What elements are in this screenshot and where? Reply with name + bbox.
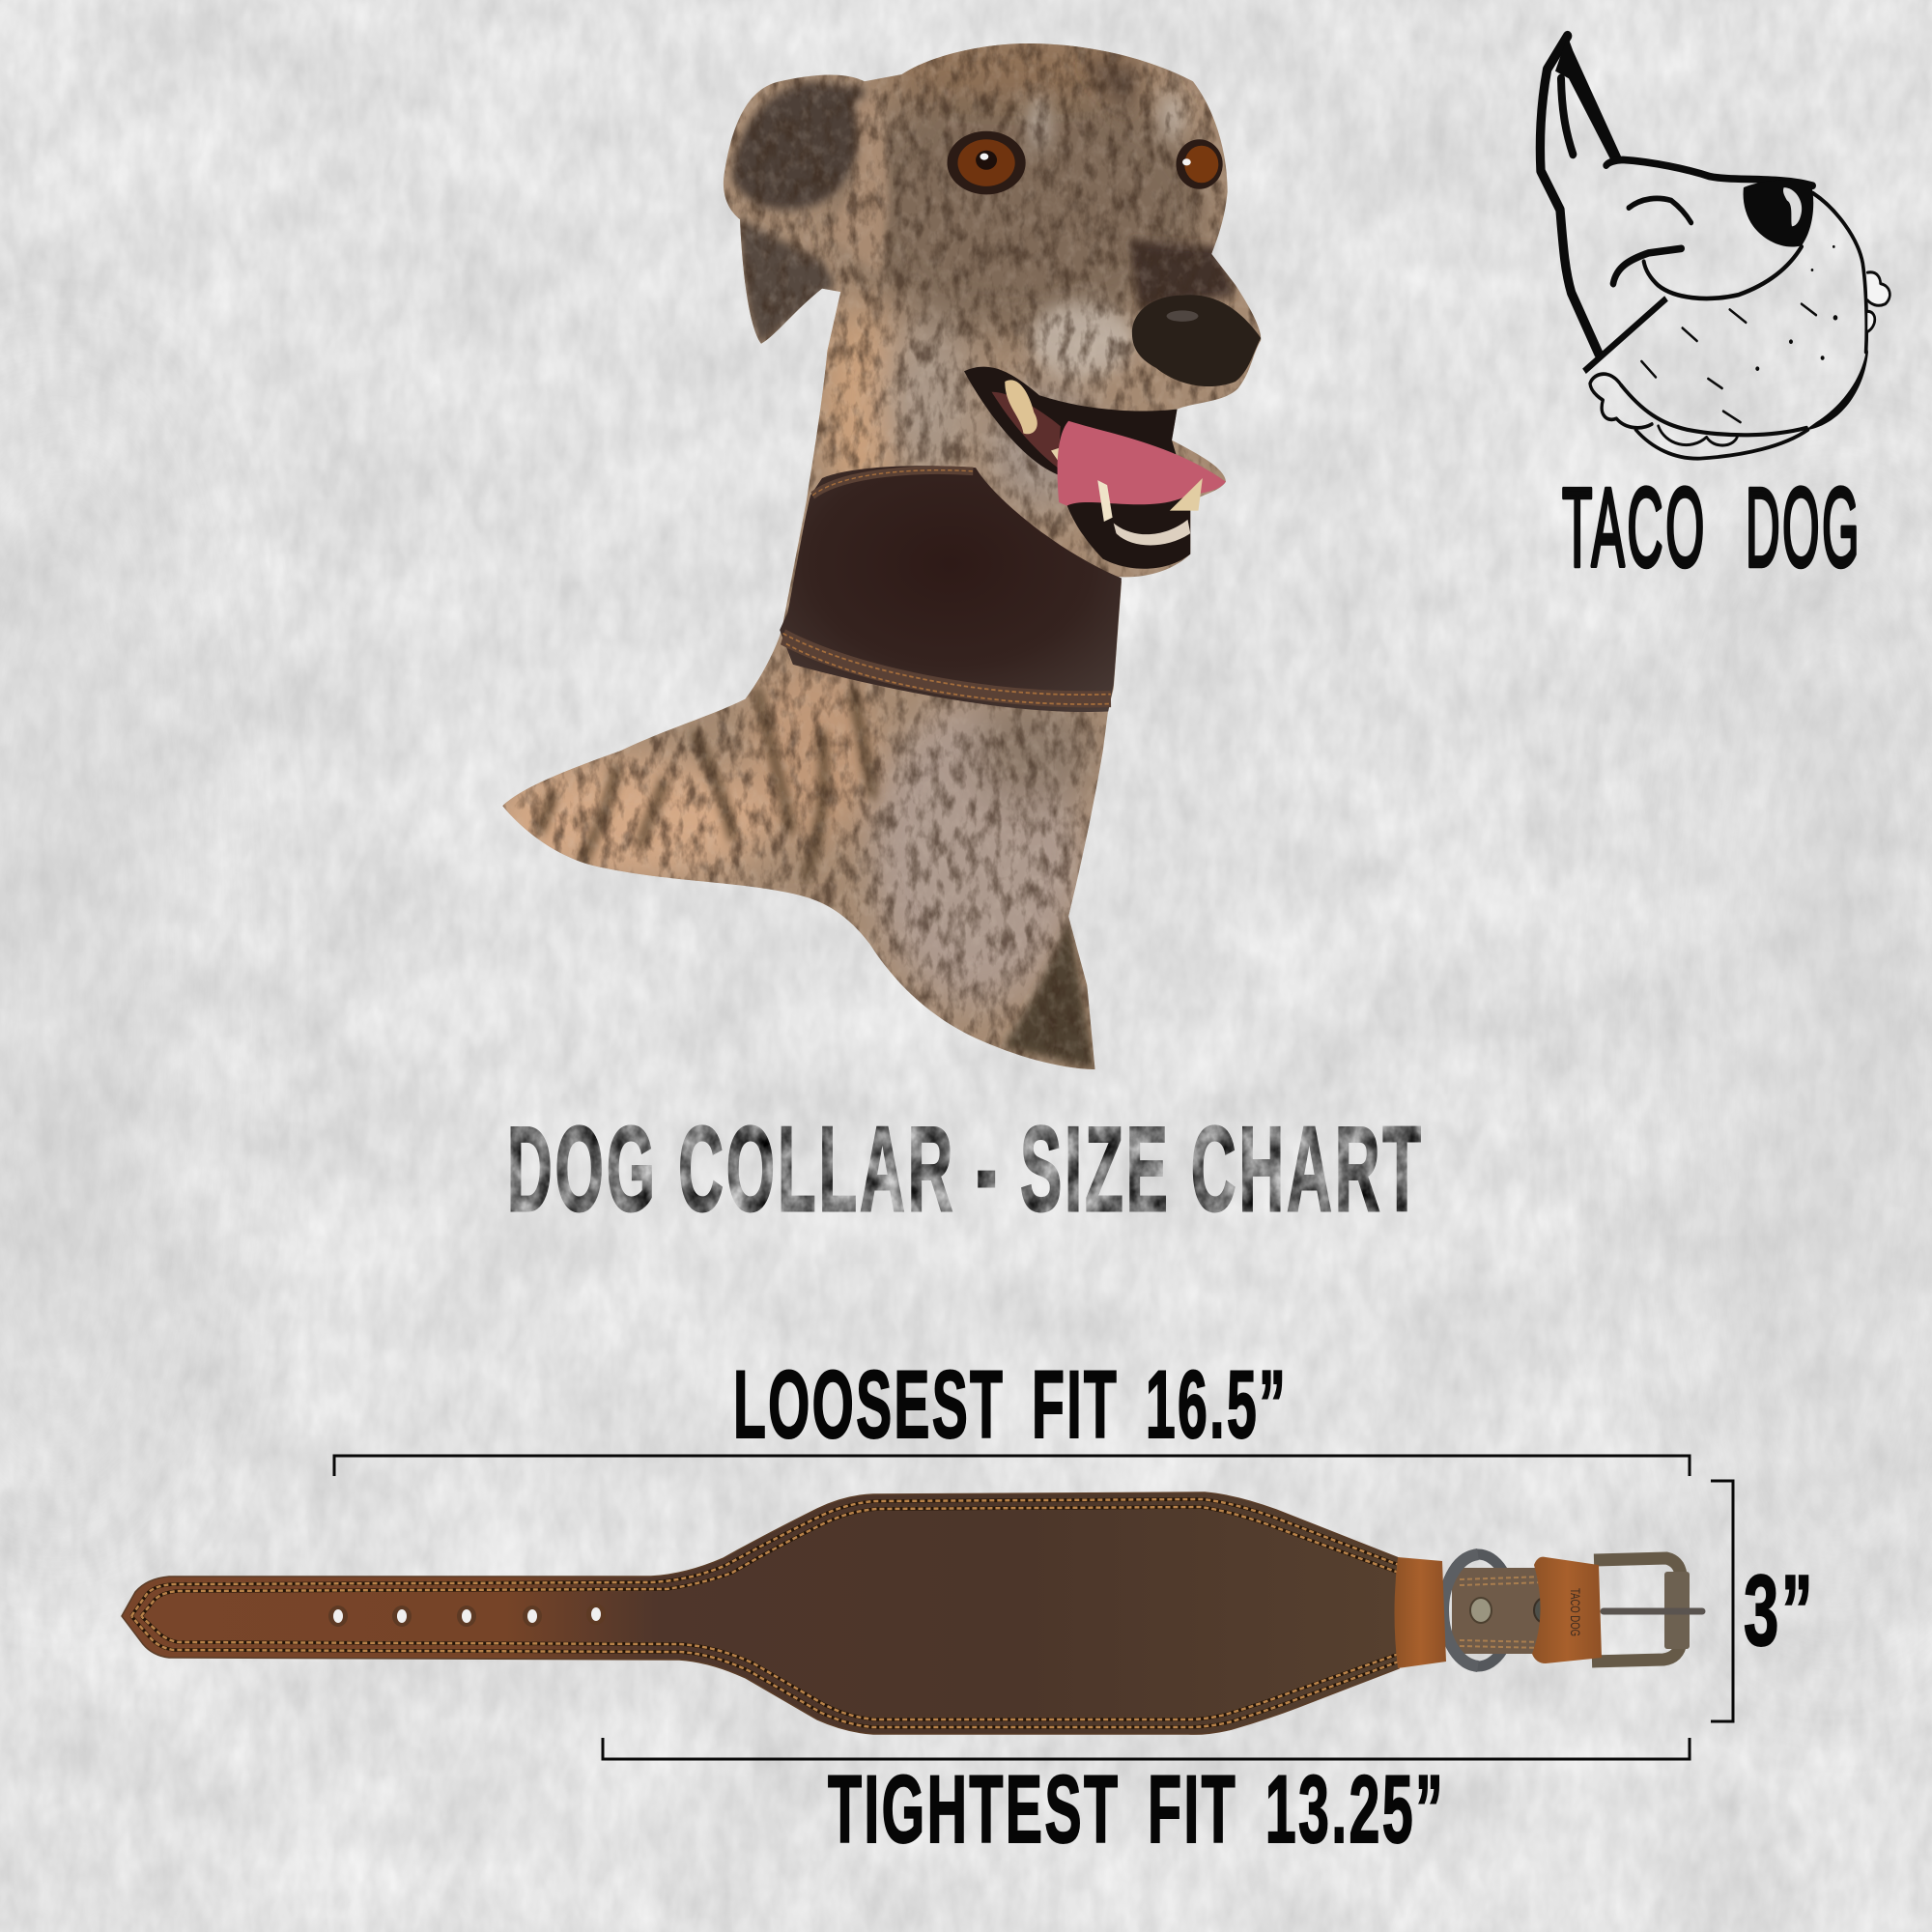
Taco Dog brand logo xyxy=(1540,36,1889,459)
logo head line and nose xyxy=(1606,159,1813,247)
metal ring back xyxy=(1443,1554,1513,1666)
first leather keeper xyxy=(1395,1557,1446,1668)
leather collar on neck xyxy=(780,466,1122,712)
collar body xyxy=(122,1492,1399,1734)
logo taco shell and fillings xyxy=(1590,193,1889,459)
loosest fit bracket xyxy=(334,1456,1690,1476)
logo eye, cheek and mouth xyxy=(1584,198,1802,371)
tightest fit label: TIGHTEST FIT 13.25” xyxy=(828,1755,1445,1862)
second leather keeper with brand stamp xyxy=(1532,1557,1602,1663)
greyhound wearing the collar xyxy=(502,43,1262,1070)
collar adjustment holes xyxy=(328,1604,606,1627)
leather collar product photo xyxy=(122,1492,1702,1734)
open mouth and tongue xyxy=(964,367,1226,569)
right and left dog eyes xyxy=(947,131,1223,194)
inner strap and rivets xyxy=(1452,1568,1555,1654)
second leather keeper with brand stamp: TACO DOG xyxy=(1568,1588,1583,1636)
loosest fit label: LOOSEST FIT 16.5” xyxy=(733,1350,1288,1458)
logo ear outline xyxy=(1540,36,1622,354)
metal ring front xyxy=(1443,1554,1478,1666)
collar width label: 3” xyxy=(1744,1555,1815,1667)
dog fur silhouette xyxy=(502,43,1262,1070)
dog nose xyxy=(1132,295,1261,386)
logo wordmark: TACO xyxy=(1562,465,1707,590)
buckle frame and prong xyxy=(1592,1558,1702,1662)
tightest fit bracket xyxy=(603,1738,1690,1759)
collar width bracket xyxy=(1711,1481,1733,1721)
